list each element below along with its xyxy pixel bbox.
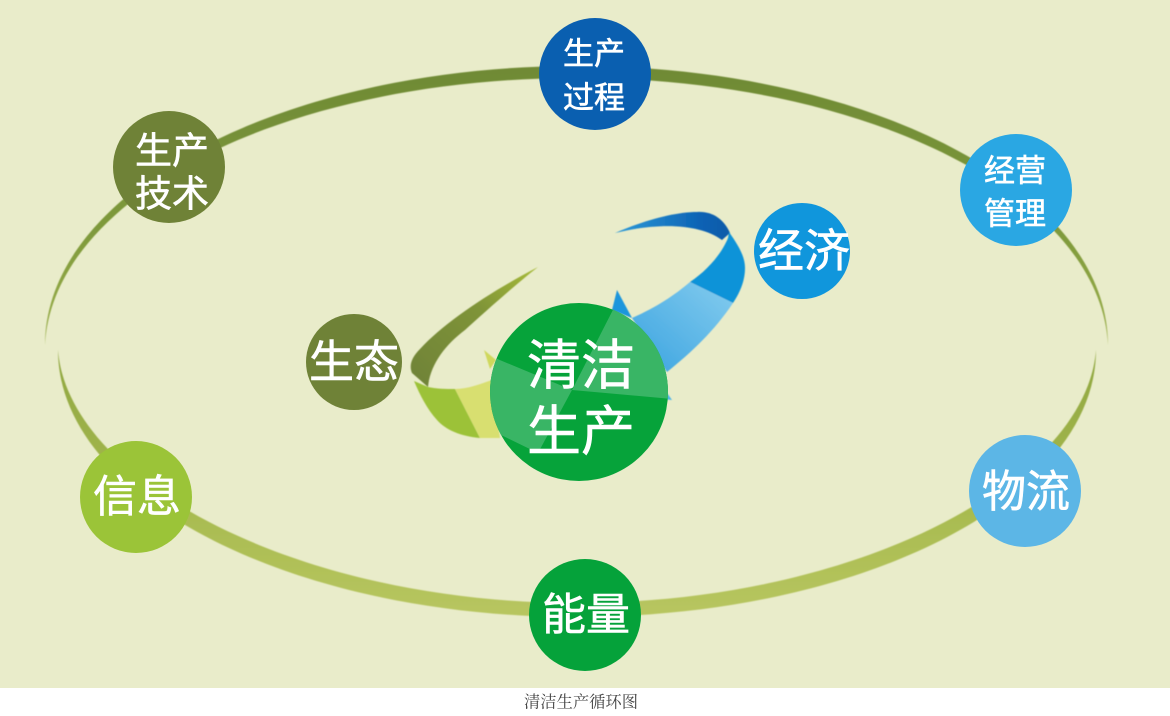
- node: 物流: 物流: [982, 468, 1070, 516]
- node: 经济: [754, 203, 850, 299]
- node: 生态: 生态: [309, 336, 399, 388]
- lower ring arc: [58, 350, 1096, 617]
- upper ring arc: [45, 66, 1108, 345]
- node: 经济: 经济: [758, 225, 850, 277]
- node: 经营管理: [960, 134, 1072, 246]
- node: 信息: [80, 441, 192, 553]
- translucent light segments: [490, 310, 668, 449]
- node: 清洁生产: 清洁: [527, 336, 635, 396]
- node: 经营管理: 经营: [984, 154, 1046, 188]
- node: 生产技术: [113, 111, 225, 223]
- node: 生态: [306, 314, 402, 410]
- node: 经营管理: 管理: [984, 196, 1046, 232]
- node: 清洁生产: [490, 303, 668, 481]
- node: 物流: [969, 435, 1081, 547]
- node: 生产技术: 生产: [135, 130, 209, 172]
- node: 清洁生产: 生产: [527, 402, 635, 462]
- blue swirl arrow: [612, 212, 745, 400]
- node: 能量: [529, 559, 641, 671]
- node: 生产过程: 过程: [563, 80, 625, 116]
- node: 生产过程: [539, 18, 651, 130]
- node: 信息: 信息: [93, 472, 181, 522]
- green swirl arrow: [411, 267, 538, 438]
- node: 能量: 能量: [542, 590, 630, 640]
- caption: 清洁生产循环图: [524, 692, 638, 712]
- node: 生产过程: 生产: [563, 36, 625, 72]
- node: 生产技术: 技术: [135, 174, 209, 214]
